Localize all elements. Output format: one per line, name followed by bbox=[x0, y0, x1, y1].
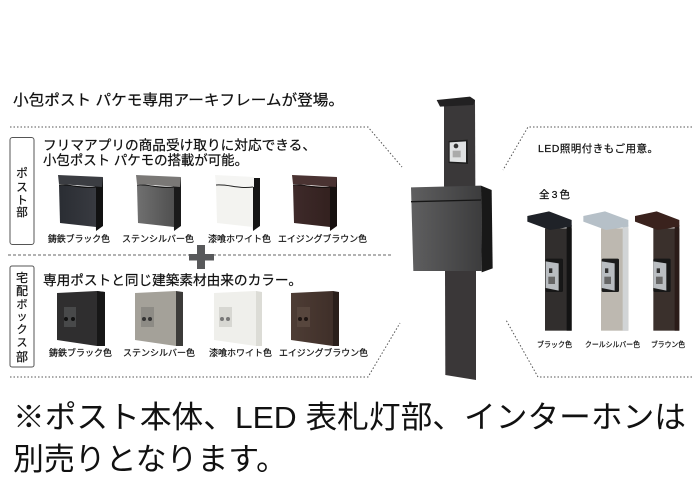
delivery box tag: 宅 bbox=[16, 271, 28, 285]
delivery box tag: ス bbox=[16, 337, 28, 349]
right bracket dotted frame bbox=[503, 127, 692, 377]
delivery box tag: ッ bbox=[16, 311, 28, 323]
LED note: LED照明付きもご用意。 bbox=[538, 142, 658, 155]
LED frame colour labels: クールシルバー色 bbox=[585, 339, 640, 349]
left bracket dotted frame bbox=[10, 127, 402, 377]
post section description: 小包ポスト パケモの搭載が可能。 bbox=[43, 152, 248, 168]
post: aging brown: エイジングブラウン色 bbox=[278, 233, 367, 244]
plus icon bbox=[189, 245, 214, 269]
post section description: フリマアプリの商品受け取りに対応できる、 bbox=[43, 138, 316, 153]
box: aging brown bbox=[279, 291, 368, 358]
LED frame colour labels bbox=[537, 339, 685, 349]
box: aging brown: エイジングブラウン色 bbox=[279, 347, 368, 358]
delivery box tag: 部 bbox=[16, 350, 28, 364]
post section tag: ト bbox=[16, 195, 28, 207]
box: plaster white bbox=[209, 291, 272, 358]
delivery box tag bbox=[10, 266, 34, 367]
LED frame colours bbox=[527, 211, 679, 331]
post section tag: 部 bbox=[16, 206, 28, 219]
footnote bbox=[13, 400, 686, 477]
frame cap bbox=[437, 97, 475, 107]
box: stainless silver: ステンシルバー色 bbox=[123, 347, 195, 358]
post box bbox=[411, 186, 493, 272]
box: stainless silver bbox=[123, 291, 195, 358]
post: stainless silver bbox=[122, 175, 194, 244]
frame upper bbox=[444, 100, 475, 187]
intercom bbox=[449, 140, 468, 164]
delivery box tag: ク bbox=[16, 323, 28, 336]
post: black: 鋳鉄ブラック色 bbox=[48, 233, 110, 244]
delivery box tag: ボ bbox=[16, 298, 28, 311]
post: plaster white: 漆喰ホワイト色 bbox=[208, 233, 271, 244]
delivery box tag: 配 bbox=[16, 284, 28, 298]
post section tag bbox=[10, 138, 34, 244]
divider dashed line bbox=[8, 254, 392, 256]
LED frame: black bbox=[527, 211, 572, 331]
footnote: ※ポスト本体、LED 表札灯部、インターホンは bbox=[13, 400, 686, 435]
box: black: 鋳鉄ブラック色 bbox=[49, 347, 112, 358]
post section description bbox=[43, 138, 316, 168]
central product: arch frame with post bbox=[411, 97, 493, 380]
title: 小包ポスト パケモ専用アーキフレームが登場。 bbox=[13, 92, 344, 109]
LED frame: cool silver bbox=[583, 211, 628, 331]
LED frame colour labels: ブラック色 bbox=[537, 339, 572, 349]
panel: delivery box section bbox=[10, 266, 368, 367]
box: plaster white: 漆喰ホワイト色 bbox=[209, 347, 272, 358]
post section tag: ス bbox=[16, 182, 28, 194]
post section tag: ポ bbox=[16, 167, 28, 180]
LED frame: brown bbox=[635, 211, 679, 331]
post: plaster white bbox=[208, 175, 271, 244]
delivery box description: 専用ポストと同じ建築素材由来のカラー。 bbox=[43, 273, 302, 288]
post: aging brown bbox=[278, 175, 367, 244]
frame lower bbox=[445, 270, 476, 380]
panel: post section bbox=[10, 138, 367, 244]
LED frame colour labels: ブラウン色 bbox=[651, 339, 685, 349]
footnote: 別売りとなります。 bbox=[13, 442, 287, 477]
box: black bbox=[49, 291, 112, 358]
post: black bbox=[48, 175, 110, 244]
colour count heading: 全3色 bbox=[539, 188, 570, 201]
post: stainless silver: ステンシルバー色 bbox=[122, 233, 194, 244]
